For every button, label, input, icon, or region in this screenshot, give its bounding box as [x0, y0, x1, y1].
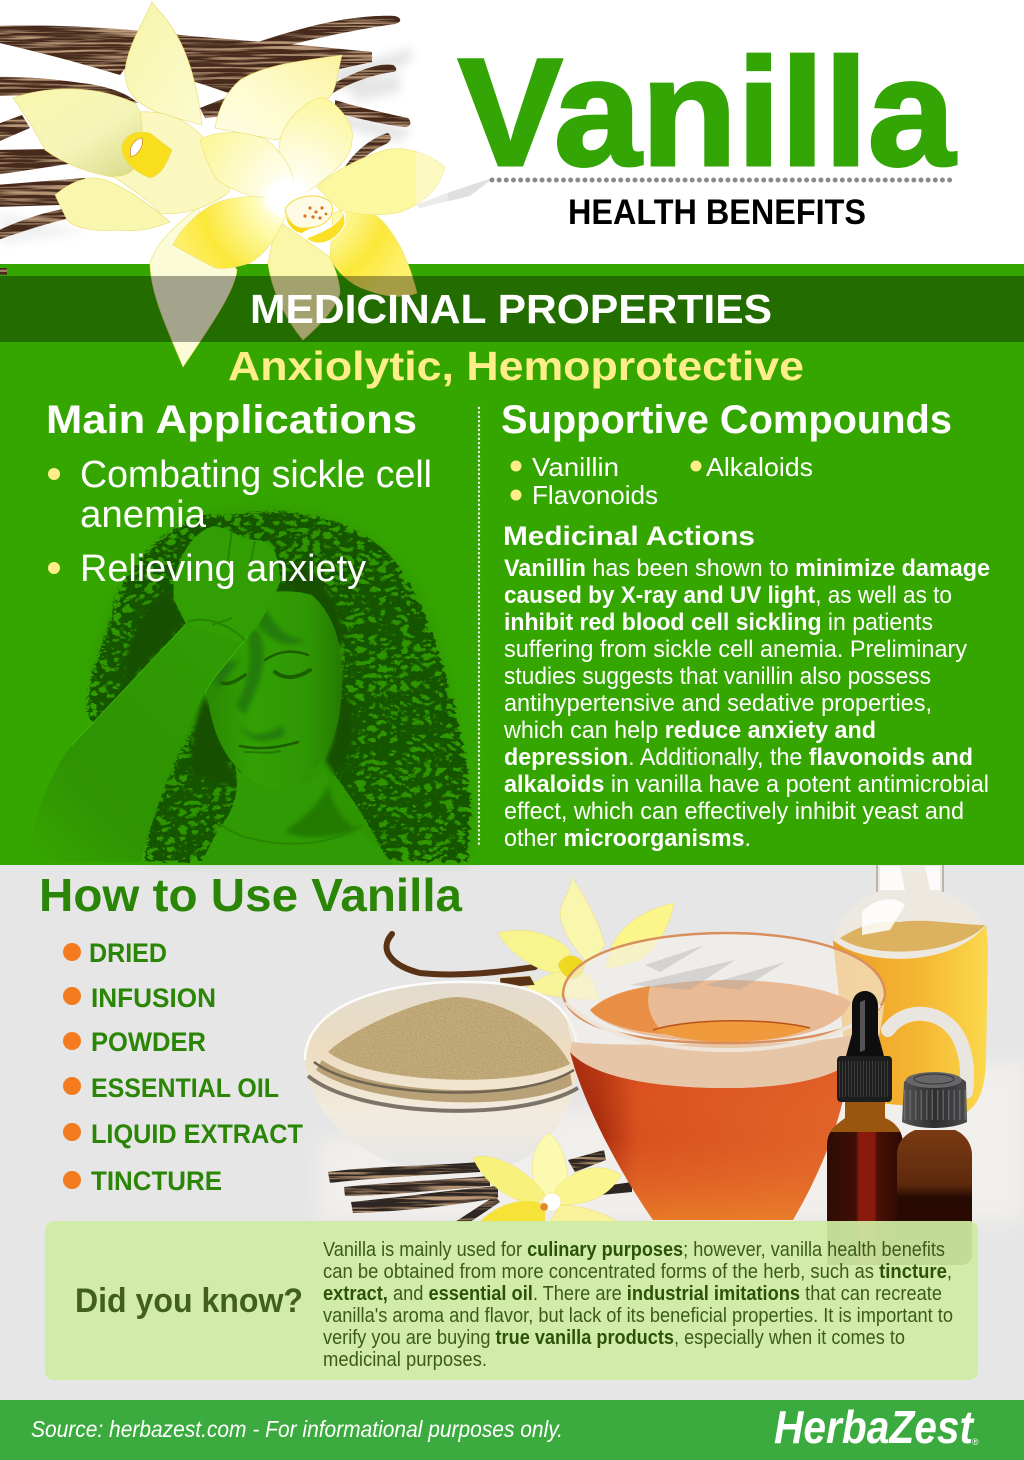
- footer: [0, 1400, 1024, 1460]
- bullet: sickle cell: anemia: [80, 494, 207, 536]
- flower one: left bloom: [13, 2, 342, 231]
- heading: How to Use Vanilla: How to Use Vanilla: [39, 869, 462, 921]
- heading: Main Applications: Main Applications: [46, 398, 417, 442]
- medicinal actions paragraph: other microorganisms.: [504, 825, 751, 852]
- arm edge highlight: [72, 624, 252, 745]
- right edge fade: [416, 145, 448, 215]
- vanilla beans: [0, 16, 410, 275]
- medicinal actions paragraph: which can help reduce anxiety and: [503, 717, 876, 744]
- flower centre glow: [263, 178, 311, 218]
- fist: [173, 526, 280, 642]
- compound list: Alkaloids: [706, 452, 813, 482]
- heading: Supportive Compounds: Supportive Compounds: [501, 398, 952, 442]
- medicinal actions paragraph: antihypertensive and sedative properties,: [504, 690, 932, 717]
- callout paragraph: can be obtained from more concentrated forms of the herb, such as tincture,: [323, 1261, 952, 1283]
- callout paragraph: [323, 1239, 953, 1371]
- subtitle: Health Benefits: HEALTH BENEFITS: [568, 193, 866, 232]
- medicinal actions paragraph: [503, 555, 990, 852]
- callout paragraph: extract, and essential oil. There are industrial imitations that can recreate: [323, 1283, 942, 1305]
- glass tea cup: [563, 933, 967, 1222]
- callout paragraph: Vanilla is mainly used for culinary purposes; however, vanilla health benefits: [323, 1239, 945, 1261]
- dark heading band: [0, 276, 1024, 342]
- medicinal actions paragraph: depression. Additionally, the flavonoids and: [504, 744, 973, 771]
- shirt collar: [218, 822, 362, 844]
- illustration: vanilla products: [305, 865, 1024, 1265]
- illustration: vanilla beans and flowers: [0, 2, 495, 367]
- lower flower: [473, 1133, 621, 1222]
- item: powder: POWDER: [91, 1027, 206, 1057]
- medicinal actions paragraph: inhibit red blood cell sickling in patients: [504, 609, 933, 636]
- bullet: anxiety: Relieving anxiety: [80, 548, 366, 590]
- callout paragraph: vanilla's aroma and flavor, but lack of its beneficial properties. It is important to: [323, 1305, 953, 1327]
- bullet: sickle cell: Combating sickle cell: [80, 454, 432, 496]
- small brown bottle: [897, 1072, 972, 1265]
- panel: did you know: [45, 1221, 978, 1380]
- item: essential oil: ESSENTIAL OIL: [91, 1073, 279, 1103]
- title: Vanilla: Vanilla: [458, 27, 957, 198]
- raised arm: [28, 624, 252, 862]
- callout box: [45, 1221, 978, 1380]
- solid dark hair areas: [108, 560, 354, 790]
- subheading: properties list: Anxiolytic, Hemoprotective: [228, 343, 804, 389]
- medicinal actions paragraph: Vanillin has been shown to minimize damage: [504, 555, 990, 582]
- item: liquid extract: LIQUID EXTRACT: [91, 1119, 303, 1149]
- bean reflection: [630, 945, 785, 990]
- textured hair: [84, 509, 467, 858]
- panel: supportive compounds: [501, 398, 990, 852]
- heading: Medicinal Actions: Medicinal Actions: [503, 521, 755, 551]
- neck shadow: [285, 785, 358, 837]
- cup glass: [563, 933, 885, 1222]
- face: [206, 591, 342, 790]
- curled vanilla bean: [387, 934, 535, 974]
- flower lip and stamens: [285, 196, 345, 243]
- brow, eyes and mouth: [222, 652, 310, 753]
- compound list: [510, 452, 813, 510]
- item: tincture: TINCTURE: [91, 1166, 222, 1196]
- heading: Medicinal Properties: MEDICINAL PROPERTIES: [250, 286, 772, 332]
- cup handle: [888, 1014, 967, 1092]
- medicinal actions paragraph: effect, which can effectively inhibit yeast and: [504, 798, 964, 825]
- logo: HerbaZest: HerbaZest: [774, 1401, 974, 1453]
- face shadows: [206, 600, 305, 741]
- faded bean ghost: [416, 177, 495, 208]
- panel: main applications: [46, 398, 432, 590]
- grey usage section background: [0, 865, 1024, 1400]
- bean shadows: [0, 48, 412, 244]
- vertical dotted divider: [478, 408, 480, 844]
- oil bottle: [833, 865, 988, 1112]
- floor glow: [320, 1060, 1024, 1221]
- item: dried: DRIED: [89, 938, 167, 968]
- cup rim: [563, 933, 885, 1043]
- medicinal actions paragraph: studies suggests that vanillin also possess: [504, 663, 931, 690]
- tea surface back: [590, 980, 851, 1042]
- footer bar: [0, 1400, 1024, 1460]
- shirt and neck: [200, 765, 395, 865]
- usage list: [63, 938, 303, 1196]
- medicinal actions paragraph: caused by X-ray and UV light, as well as to: [504, 582, 952, 609]
- tea surface highlights: [590, 986, 665, 1034]
- flower two: right bloom: [150, 97, 445, 367]
- glass bowl of vanilla powder: [305, 982, 578, 1165]
- dotted divider: [492, 178, 951, 182]
- dropper bottle: [827, 991, 903, 1265]
- callout heading: Did you know?: [75, 1282, 303, 1320]
- tea meniscus band: [570, 1030, 866, 1088]
- upper flower: [498, 878, 674, 1000]
- compound list: Vanillin: [532, 452, 619, 482]
- medicinal actions paragraph: alkaloids in vanilla have a potent antimicrobial: [504, 771, 989, 798]
- item: infusion: INFUSION: [91, 983, 216, 1013]
- callout paragraph: medicinal purposes.: [323, 1349, 487, 1371]
- dried vanilla beans: [328, 1150, 632, 1222]
- soft hair halo: [95, 510, 470, 855]
- callout paragraph: verify you are buying true vanilla products, especially when it comes to: [323, 1327, 905, 1349]
- source note: Source: herbazest.com - For informational purposes only.: [31, 1416, 563, 1442]
- illustration: woman with headache, green duotone: [28, 509, 470, 865]
- bullet: sickle cell: [48, 454, 432, 536]
- logo: HerbaZest: ®: [972, 1437, 979, 1447]
- green medicinal section background: [0, 264, 1024, 865]
- medicinal actions paragraph: suffering from sickle cell anemia. Preliminary: [504, 636, 967, 663]
- compound list: Flavonoids: [532, 480, 658, 510]
- tea body: [570, 1052, 850, 1220]
